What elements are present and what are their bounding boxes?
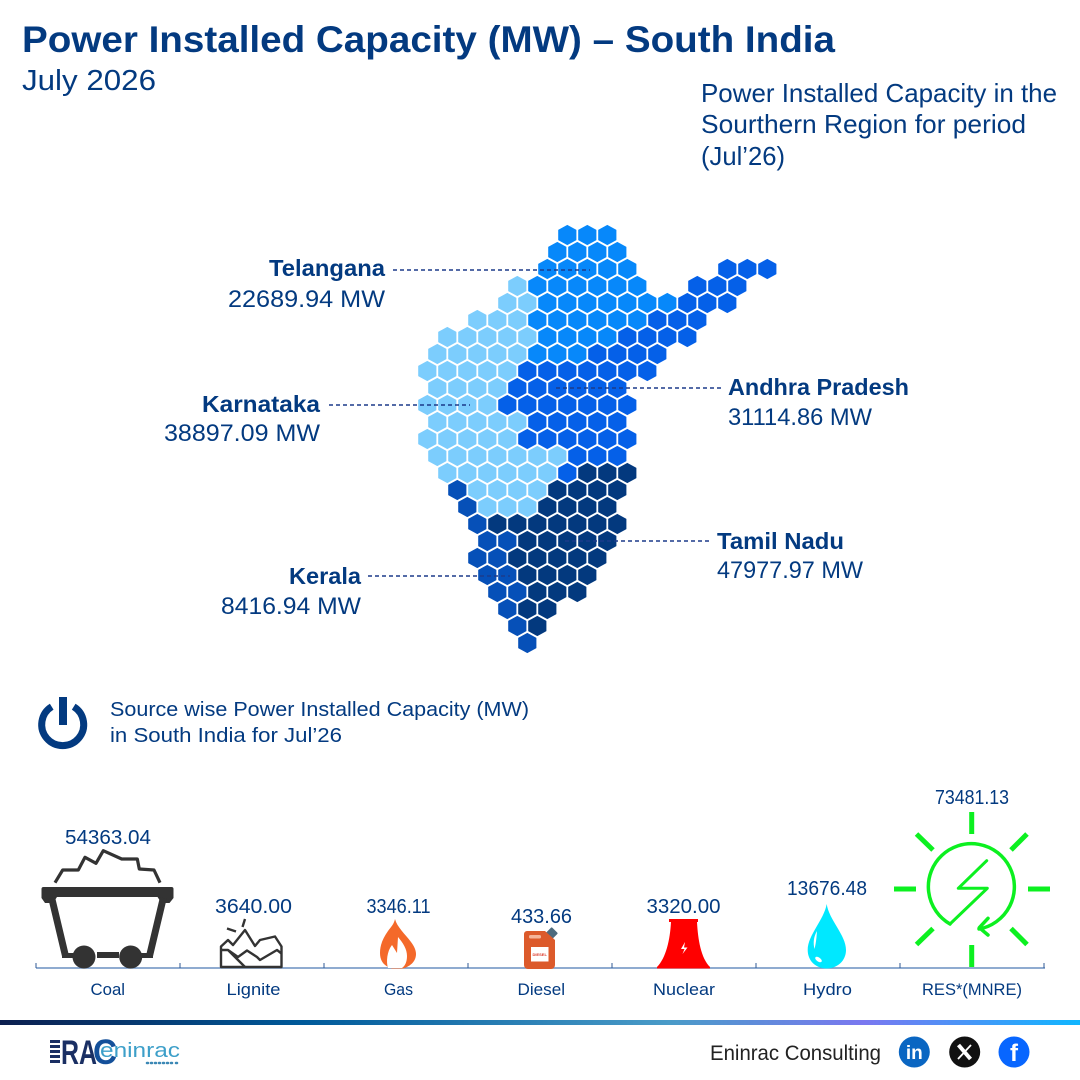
callout: Tamil Nadu: Tamil Nadu xyxy=(717,528,844,554)
chart values: 13676.48 xyxy=(787,878,867,900)
icon: gas flame xyxy=(380,919,416,968)
callout: Telangana: Telangana xyxy=(269,255,385,281)
logo: RAC eninrac: eninrac xyxy=(100,1040,180,1062)
description text block: Power Installed Capacity in the xyxy=(701,78,1057,108)
subtitle: date: July 2026 xyxy=(22,65,156,97)
callout: Kerala xyxy=(221,563,510,620)
chart category labels: Nuclear xyxy=(653,980,715,999)
chart values: 3640.00 xyxy=(215,896,292,918)
logo: RAC eninrac: C xyxy=(93,1033,117,1072)
description text block xyxy=(701,78,1057,171)
chart values: 3346.11 xyxy=(366,896,430,918)
chart category labels: Gas xyxy=(384,980,413,999)
callout: Tamil Nadu xyxy=(565,528,863,584)
icon: diesel can xyxy=(524,927,558,969)
icon: X xyxy=(949,1036,980,1068)
callout: Andhra Pradesh: Andhra Pradesh xyxy=(728,374,909,400)
chart axis xyxy=(36,963,1045,968)
callout: Kerala: 8416.94 MW xyxy=(221,593,361,620)
icon: hydro water drop xyxy=(808,904,846,968)
map region: Karnataka xyxy=(419,276,566,517)
icon: LinkedIn: in xyxy=(906,1043,923,1064)
callout: Kerala: Kerala xyxy=(289,563,361,589)
footer gradient bar xyxy=(0,1020,1080,1025)
chart category labels: RES*(MNRE) xyxy=(922,980,1022,999)
callout: Telangana: 22689.94 MW xyxy=(228,286,385,313)
chart values: 73481.13 xyxy=(935,787,1009,809)
source section heading xyxy=(110,698,529,747)
map region: Tamil Nadu xyxy=(489,463,636,636)
icon: Facebook xyxy=(998,1036,1030,1068)
chart values: 54363.04 xyxy=(65,827,151,849)
map region: Telangana xyxy=(529,225,676,364)
map region: Andhra Pradesh xyxy=(499,259,776,483)
chart values: 3320.00 xyxy=(646,896,720,918)
source section heading: Source wise Power Installed Capacity (MW) xyxy=(110,698,529,721)
map region: Kerala xyxy=(449,480,536,653)
hexagon map of South India xyxy=(419,225,776,653)
chart category labels xyxy=(90,980,1022,999)
callout: Tamil Nadu: 47977.97 MW xyxy=(717,557,863,584)
chart values xyxy=(65,787,1009,928)
chart category labels: Coal xyxy=(90,980,125,999)
icon: diesel can: DIESEL xyxy=(532,952,547,957)
callout: Karnataka: 38897.09 MW xyxy=(164,420,320,447)
icon: nuclear cooling tower xyxy=(657,919,710,968)
title: Power Installed Capacity (MW) – South India xyxy=(22,19,835,60)
chart category labels: Lignite xyxy=(226,980,280,999)
icon: Facebook: f xyxy=(1010,1040,1019,1067)
logo: RAC eninrac: RA xyxy=(61,1034,97,1072)
callout: Karnataka: Karnataka xyxy=(202,391,320,417)
chart category labels: Diesel xyxy=(518,980,565,999)
callout: Telangana xyxy=(228,255,590,313)
chart category labels: Hydro xyxy=(803,980,852,999)
source section heading: in South India for Jul’26 xyxy=(110,724,342,747)
icon: LinkedIn xyxy=(899,1036,930,1068)
callout: Karnataka xyxy=(164,391,470,447)
logo: RAC eninrac xyxy=(50,1033,180,1072)
callout: Andhra Pradesh: 31114.86 MW xyxy=(728,404,872,431)
description text block: Sourthern Region for period xyxy=(701,109,1026,139)
icon: power button xyxy=(42,697,84,746)
icon: coal cart xyxy=(42,851,174,968)
footer brand name: Eninrac Consulting xyxy=(710,1042,881,1065)
callout: Andhra Pradesh xyxy=(556,374,909,431)
icon: renewable energy sun xyxy=(894,812,1050,967)
chart values: 433.66 xyxy=(511,906,572,928)
description text block: (Jul’26) xyxy=(701,141,785,171)
icon: lignite rock xyxy=(221,919,282,967)
